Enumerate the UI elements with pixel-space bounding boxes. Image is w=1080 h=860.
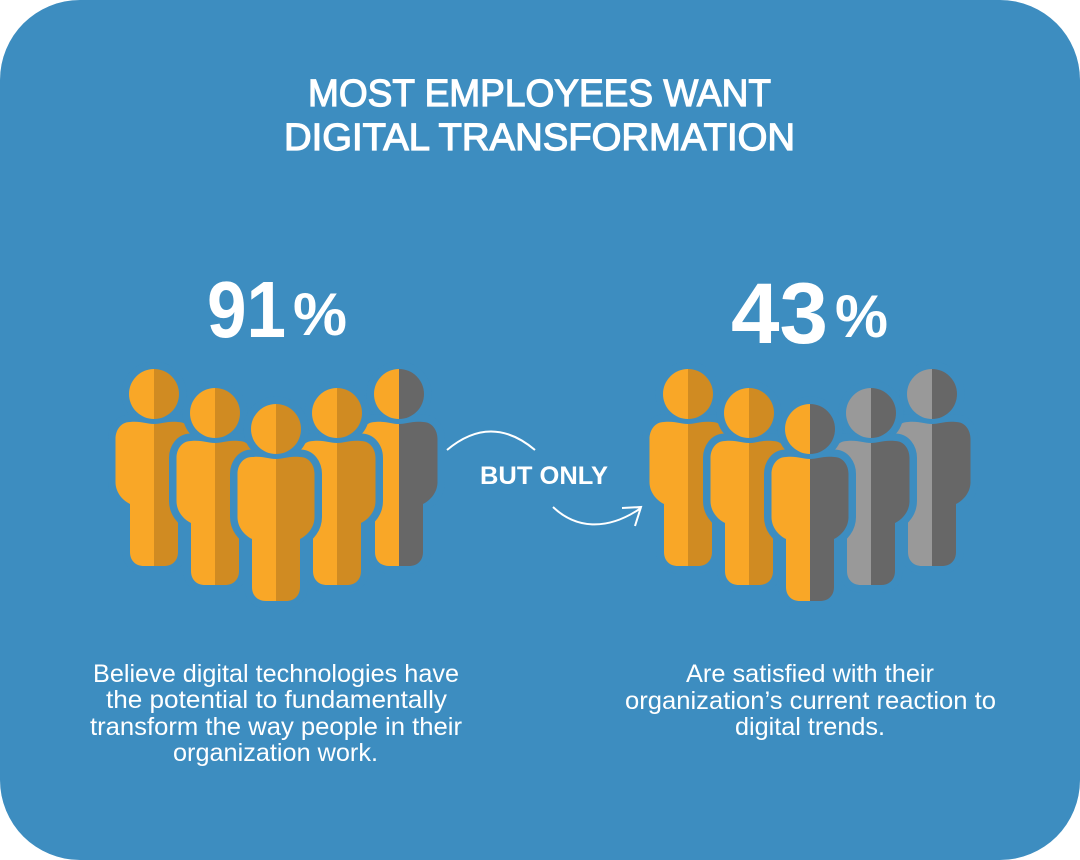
text: right description: organization’s current reaction to	[625, 687, 996, 715]
text: left description: transform the way people in their	[90, 713, 462, 741]
arrow: upper arc	[447, 432, 535, 450]
stat: 91%: %	[293, 281, 347, 348]
title: DIGITAL TRANSFORMATION	[284, 117, 795, 159]
stat: 43%: 43	[731, 266, 828, 362]
text: left description: the potential to fundamentally	[106, 686, 448, 714]
title: MOST EMPLOYEES WANT	[308, 73, 771, 115]
text: left description: organization work.	[173, 739, 378, 767]
text: right description	[625, 660, 996, 741]
stat: 91%	[207, 265, 347, 354]
text: right description: digital trends.	[735, 713, 885, 741]
text: right description: Are satisfied with their	[686, 660, 934, 688]
stat: 43%: %	[835, 283, 888, 350]
label: but only: BUT ONLY	[480, 462, 608, 490]
stat: 43%	[731, 266, 888, 362]
stat: 91%: 91	[207, 265, 286, 354]
icon: group of people, 43 percent	[650, 369, 970, 601]
arrow: lower arc with head	[553, 507, 641, 526]
title	[284, 73, 795, 159]
text: left description	[90, 660, 462, 767]
icon: group of people, 91 percent	[116, 369, 438, 601]
text: left description: Believe digital technologies have	[93, 660, 459, 688]
